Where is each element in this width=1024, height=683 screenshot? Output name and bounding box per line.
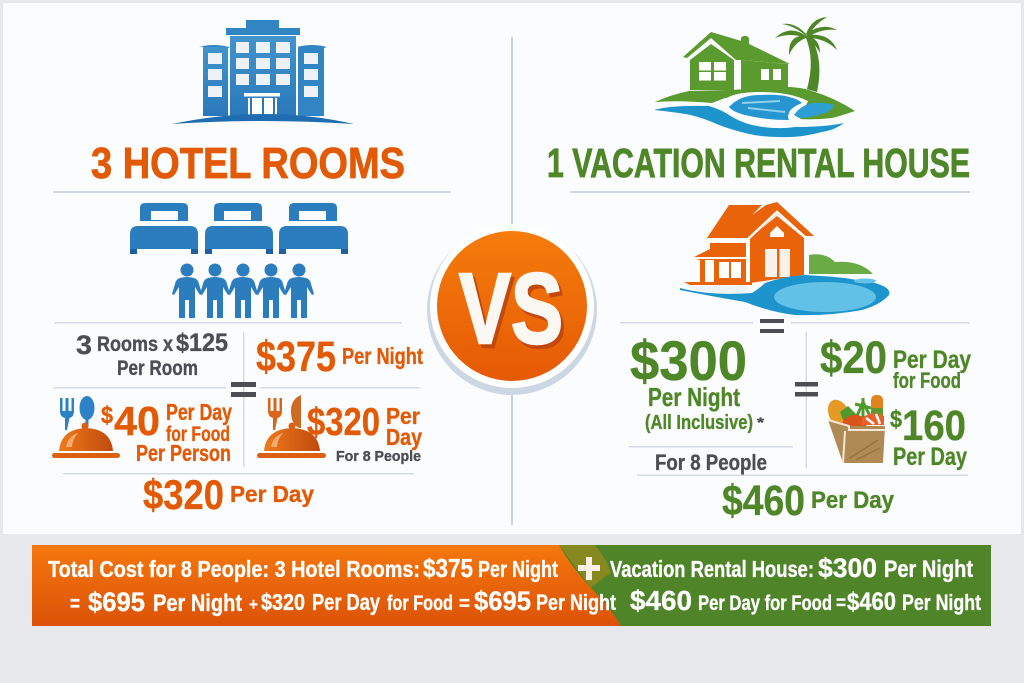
icon: five people bbox=[172, 264, 314, 318]
text: $320 per day for 8 people: For 8 People bbox=[336, 448, 421, 465]
icon: plus sign bbox=[578, 557, 600, 580]
text: rental total row one: $300 bbox=[818, 553, 877, 583]
text: $20 per day for food bbox=[820, 332, 971, 393]
text: hotel total: Per Day bbox=[230, 481, 314, 507]
icon: equals sign middle bbox=[795, 382, 818, 396]
text: rooms calculation: Rooms x bbox=[97, 333, 173, 356]
text: rooms calculation: Per Room bbox=[117, 357, 198, 380]
icon: orange house with pool bbox=[680, 202, 889, 315]
text: $160 per day: $ bbox=[890, 406, 903, 433]
panel: hotel option bbox=[52, 20, 451, 518]
text: rental total row two bbox=[630, 585, 982, 616]
text: hotel total row two: $320 bbox=[261, 589, 305, 615]
text: for 8 people: For 8 People bbox=[655, 450, 767, 475]
text: rental total row one: Per Night bbox=[884, 556, 973, 583]
text: hotel total row two: Per Day bbox=[312, 589, 380, 615]
text: $40 per day per person: Per Day bbox=[166, 399, 232, 425]
text: rental total row one bbox=[610, 553, 973, 583]
text: rental total row one: Vacation Rental House: bbox=[610, 556, 814, 582]
text: $160 per day bbox=[890, 402, 967, 471]
text: hotel total row one: Total Cost for 8 People: 3 Hotel Rooms: bbox=[48, 556, 420, 582]
text: $320 per day for 8 people: $320 bbox=[307, 401, 380, 444]
text: rental total row two: Per Day for Food bbox=[698, 592, 832, 615]
text: $40 per day per person bbox=[101, 398, 232, 466]
text: rooms calculation: 3 bbox=[76, 330, 92, 360]
text: $320 per day for 8 people bbox=[307, 401, 422, 465]
text: $40 per day per person: for Food bbox=[166, 423, 230, 446]
icon: green house with palm and pool bbox=[654, 17, 855, 137]
panel: total cost bar bbox=[32, 545, 991, 626]
icon: hotel building bbox=[172, 20, 354, 124]
text: $320 per day for 8 people: Per bbox=[386, 403, 420, 429]
text: hotel total row two: $695 bbox=[88, 587, 145, 617]
icon: fork, spoon and cloche bbox=[52, 396, 120, 458]
text: rental total row two: Per Night bbox=[902, 590, 982, 615]
text: $160 per day: 160 bbox=[902, 402, 966, 450]
text: $40 per day per person: 40 bbox=[114, 398, 160, 444]
text: rental total bbox=[722, 477, 895, 525]
icon: fork, knife and cloche bbox=[257, 395, 326, 458]
text: hotel total row two: = bbox=[459, 593, 470, 615]
text: $300 per night all inclusive: (All Inclusive) bbox=[645, 412, 753, 434]
text: rental total row two: $460 bbox=[630, 585, 692, 616]
text: $40 per day per person: Per Person bbox=[136, 440, 231, 466]
text: rental total row two: $460 bbox=[847, 588, 896, 616]
icon: equals sign top bbox=[760, 319, 784, 333]
text: $300 per night all inclusive bbox=[630, 329, 765, 434]
text: $300 per night all inclusive: * bbox=[757, 414, 765, 430]
text: hotel total row two: + bbox=[249, 595, 258, 614]
text: hotel total: $320 bbox=[143, 471, 224, 518]
text: $20 per day for food: Per Day bbox=[893, 346, 971, 374]
text: rooms calculation bbox=[76, 329, 228, 380]
badge: VS: VS bbox=[459, 253, 563, 365]
text: $375 per night: $375 bbox=[256, 333, 336, 381]
text: hotel total bbox=[143, 471, 314, 518]
text: hotel total row two: Per Night bbox=[536, 590, 617, 615]
text: $20 per day for food: $20 bbox=[820, 332, 887, 383]
heading: 3 hotel rooms: 3 HOTEL ROOMS bbox=[91, 139, 405, 188]
badge: VS: VS bbox=[462, 257, 566, 369]
text: $20 per day for food: for Food bbox=[893, 368, 961, 393]
text: rental total row two: = bbox=[836, 593, 846, 614]
text: hotel total row two: Per Night bbox=[153, 590, 242, 617]
icon: three beds bbox=[130, 203, 348, 254]
text: $160 per day: Per Day bbox=[893, 443, 967, 471]
text: $300 per night all inclusive: Per Night bbox=[648, 382, 740, 412]
badge: VS bbox=[427, 224, 597, 395]
icon: grocery bag bbox=[824, 395, 885, 463]
text: $320 per day for 8 people: Day bbox=[386, 424, 422, 450]
text: rental total: $460 bbox=[722, 477, 805, 525]
text: rental total: Per Day bbox=[811, 487, 895, 514]
text: $40 per day per person: $ bbox=[101, 402, 114, 429]
text: hotel total row one: Per Night bbox=[478, 556, 558, 582]
text: hotel total row two bbox=[70, 586, 617, 617]
text: hotel total row two: for Food bbox=[387, 592, 453, 615]
text: rooms calculation: $125 bbox=[176, 329, 228, 357]
text: hotel total row one: $375 bbox=[423, 553, 473, 583]
icon: equals sign bbox=[231, 382, 256, 397]
text: $375 per night bbox=[256, 333, 423, 381]
panel: comparison background bbox=[3, 3, 1021, 534]
panel: vacation rental option bbox=[547, 17, 971, 525]
text: $300 per night all inclusive: $300 bbox=[630, 329, 747, 392]
text: hotel total row two: = bbox=[70, 591, 80, 616]
text: $375 per night: Per Night bbox=[342, 343, 423, 369]
text: hotel total row two: $695 bbox=[474, 586, 531, 616]
